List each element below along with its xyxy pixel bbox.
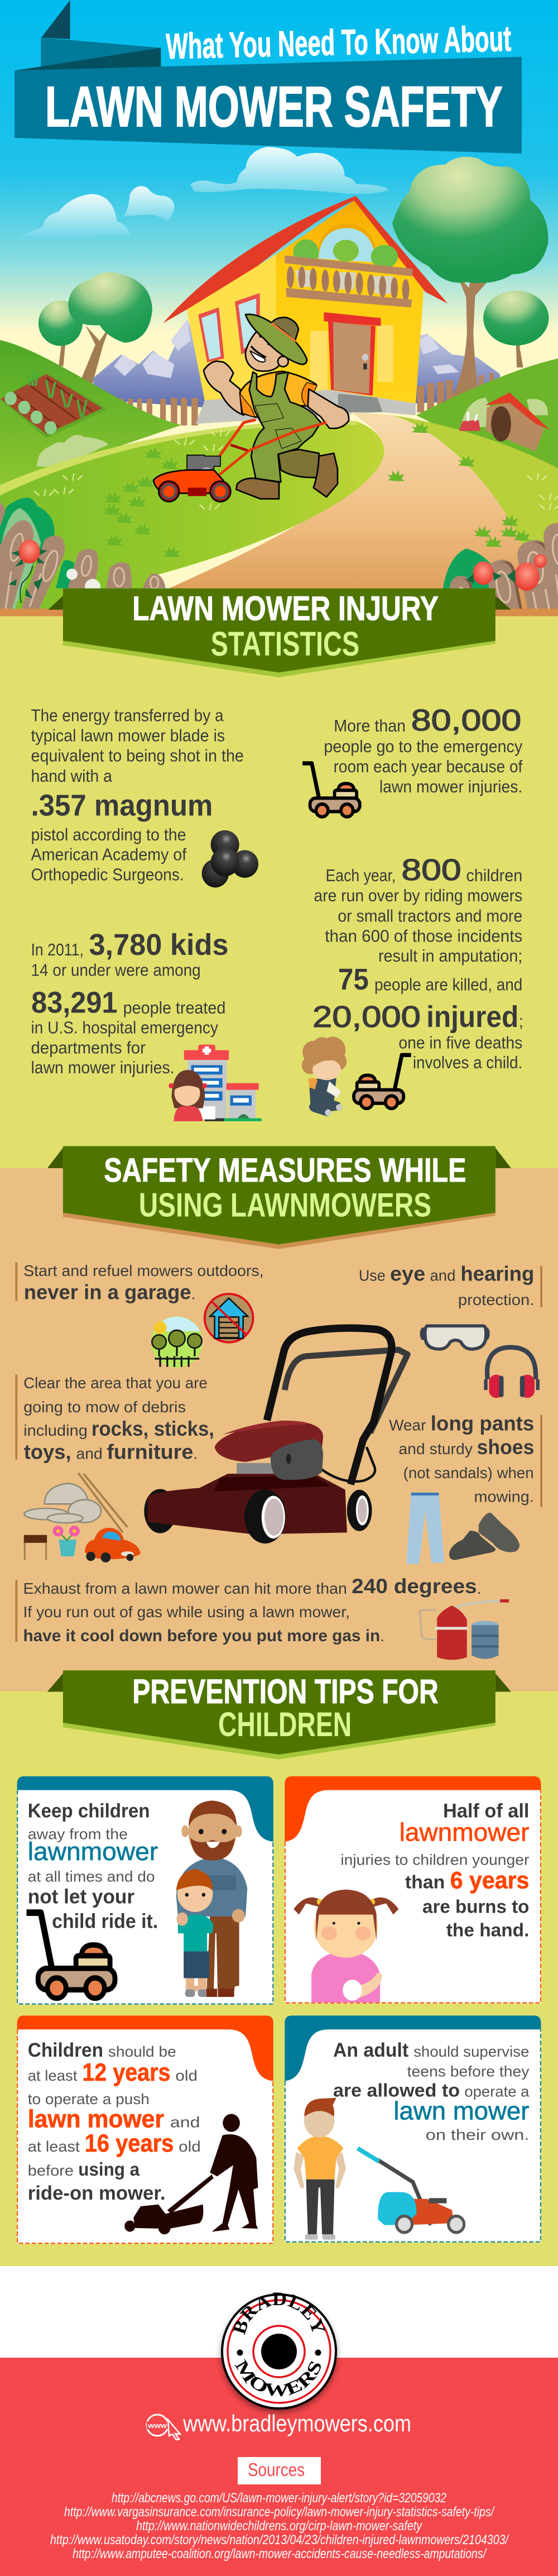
text: clear the area [15,1374,214,1463]
clouds [21,147,388,238]
right lawn [393,415,558,556]
title ribbon [15,0,522,154]
text: magnum energy: American Academy of [31,845,187,864]
text: should be [108,2043,176,2060]
text: 800 children: people are killed, and [374,976,522,995]
text: clear the area: furniture [107,1440,193,1463]
handles [285,1350,407,1433]
illustration: silhouette mowing [124,2114,258,2234]
mountains [93,319,500,408]
icon: injured child [302,1037,347,1116]
engine [237,1463,274,1474]
text: 800 children [312,854,523,1072]
far hill: right [416,359,558,474]
icon: hospital [184,1045,262,1121]
text: on their own. [426,2126,529,2143]
section banner: PREVENTION TIPS FOR [132,1672,439,1711]
text: at least [28,2067,78,2084]
sources list: http://www.nationwidechildrens.org/cirp-lawn-mower-safety [136,2518,423,2534]
icon: jeans [406,1493,444,1564]
fence: back [119,373,494,426]
title [45,18,512,138]
text: 3,780 kids: people treated [123,998,225,1017]
card: half of all [285,1776,541,2003]
text: exhaust [15,1575,481,1645]
text: never in a garage: Start and refuel mowers outdoors, [23,1262,264,1279]
text: long pants and shoes: and sturdy [398,1440,473,1457]
text: 3,780 kids: in U.S. hospital emergency [31,1019,218,1038]
panel: hero scene [0,0,558,664]
icon: mower [27,1913,115,1998]
text: old [179,2138,201,2155]
text: long pants and shoes: mowing. [474,1488,534,1505]
front boot [236,478,279,499]
text: eye and hearing: hearing [460,1262,534,1285]
text: long pants and shoes [389,1412,542,1507]
text: eye and hearing: eye [390,1262,425,1285]
deck [148,1474,347,1535]
raised arm and fist [204,361,244,415]
text: at least [28,2138,80,2155]
text: magnum energy [31,706,244,885]
background: peach safety section [0,1168,558,1692]
panel: prevention tips for children [17,1670,541,2244]
illustration: blue lawn mower [358,2148,465,2234]
section banner: LAWN MOWER INJURY [132,589,439,628]
back leg [278,450,319,477]
grass tufts [34,422,558,557]
vine [20,566,32,603]
icon: mower mirrored [354,1055,411,1108]
icon: oil can and barrel [420,1601,509,1660]
text: 800 children: 20,000 [312,1001,421,1034]
hat [272,317,299,342]
posts [0,503,166,609]
card: children should be [17,2015,273,2244]
icon: toy car [85,1528,141,1562]
text: clear the area: including [23,1422,88,1439]
bush right [461,398,548,427]
mower wheels [158,481,179,501]
text: 80,000: More than [334,716,406,735]
text: 800 children: involves a child. [413,1053,522,1072]
tree: small right [483,291,549,367]
text: 3,780 kids: 3,780 kids [89,929,228,962]
text: long pants and shoes: Wear [389,1416,426,1433]
text: never in a garage [15,1262,264,1304]
text: 6 years [450,1867,529,1894]
text: magnum energy: hand with a [31,767,113,786]
section banner: SAFETY MEASURES WHILE [104,1151,466,1189]
illustration: girl with burned hand [294,1890,398,2003]
text: at all times and do [28,1868,155,1885]
text [28,2039,201,2204]
right arm and hand [308,389,349,428]
text: 80,000: lawn mower injuries. [379,778,522,796]
text: long pants and shoes: (not sandals) when [403,1464,534,1481]
text: never in a garage: . [191,1285,195,1303]
text: lawn mower [393,2097,530,2125]
icon: no garage [205,1294,253,1342]
text: 80,000: 80,000 [411,704,521,737]
ground strip [0,609,558,616]
text: old [175,2067,198,2084]
card: keep children away [17,1776,273,2004]
text: lawn mower [28,2106,164,2133]
icon: web cursor: www [147,2421,167,2430]
text: 800 children: children [466,866,522,885]
text: are burns to [422,1896,529,1917]
gardener and lawn mower [153,314,349,501]
text: 800 children: than 600 of those incidents [325,927,522,946]
mower engine [187,455,220,479]
text: child ride it. [52,1910,158,1933]
text: than [405,1871,445,1892]
icon: rocks and sticks [24,1473,127,1532]
text: Half of all [443,1800,529,1822]
background: red footer [0,2358,558,2576]
text: exhaust: . [477,1580,481,1597]
red rose [19,539,40,563]
door [324,312,381,396]
text: clear the area: . [193,1445,198,1462]
mower deck [153,470,227,493]
vegetable garden [0,370,108,438]
tree: big right [392,157,548,398]
text: injuries to children younger [340,1851,530,1868]
tree: small left [39,300,83,366]
text: clear the area: rocks, sticks, [92,1417,214,1440]
text: clear the area: and [76,1445,103,1462]
balcony [285,240,413,308]
text: lawnmower [400,1819,530,1847]
illustration: father and son [176,1800,247,1997]
steps and base [196,390,416,424]
text: away from the [28,1825,128,1842]
overalls [249,372,321,482]
text: exhaust: . [380,1627,384,1645]
website url: www.bradleymowers.com [182,2410,411,2436]
section banner [47,1670,511,1760]
icon: safety goggles [420,1326,490,1349]
icon: ear muffs [484,1347,540,1398]
text: 800 children: result in amputation; [378,947,522,966]
text: lawnmower [28,1838,158,1866]
text: eye and hearing: and [430,1267,455,1284]
section banner: CHILDREN [218,1705,352,1743]
text: 3,780 kids: lawn mower injuries. [31,1059,175,1077]
text: magnum energy: typical lawn mower blade is [31,727,225,745]
icon: shoes [449,1513,519,1560]
mower handles [219,420,326,475]
text: 3,780 kids [31,929,228,1077]
bush [37,435,109,468]
logo: Bradley Mowers seal [217,2293,341,2417]
text: magnum energy: Orthopedic Surgeons. [31,866,184,885]
logo: Bradley Mowers seal: BRADLEY [233,2293,325,2335]
logo: Bradley Mowers seal: MOWERS [234,2359,321,2397]
text: 12 years [82,2059,171,2086]
sources list [50,2491,509,2561]
panel: lawn mower injury statistics [31,589,523,1121]
text: 3,780 kids: departments for [31,1039,146,1058]
sources heading [238,2457,321,2484]
text: 800 children: are run over by riding mowers [314,886,522,905]
bush [0,498,55,609]
card: an adult should supervise [285,2015,541,2242]
text: operate a [464,2083,530,2100]
text: clear the area: toys, [24,1440,71,1463]
section banner: STATISTICS [211,625,359,663]
text: magnum energy: pistol according to the [31,825,186,844]
icon: bullets [202,830,258,887]
icon: web cursor [147,2415,180,2440]
text: Keep children [28,1800,150,1822]
text: 800 children: ; [519,1012,523,1031]
far hill: left [0,340,181,488]
house [163,196,448,424]
icon: outdoor yard [151,1316,203,1368]
sources list: http://abcnews.go.com/US/lawn-mower-injury-alert/story?id=32059032 [112,2491,446,2506]
text: using a [78,2158,140,2180]
text [28,1800,158,1933]
section banner [48,589,511,677]
main lawn [0,420,384,616]
windows [198,308,224,362]
text: exhaust: 240 degrees [352,1575,477,1598]
text: 80,000: people go to the emergency [324,737,523,756]
background: white logo band [0,2266,558,2358]
text: eye and hearing [359,1262,542,1308]
section banner [47,1146,511,1249]
text: before [28,2162,74,2179]
text: An adult [333,2039,408,2061]
white roses [66,568,78,580]
text: 16 years [85,2130,174,2157]
text: magnum energy: equivalent to being shot in the [31,747,244,766]
text: eye and hearing: Use [359,1267,386,1284]
foreground: right bush, fence and roses [443,523,558,609]
section banner: USING LAWNMOWERS [139,1187,431,1224]
text: 800 children: one in five deaths [398,1034,522,1052]
text: the hand. [446,1919,529,1941]
text: to operate a push [28,2091,150,2107]
illustration: teen boy [294,2098,346,2240]
text: 800 children: 800 [401,854,461,887]
dirt path [107,412,558,616]
icon: mower [302,763,360,817]
icon: girl [169,1070,207,1121]
background: lime prevention section [0,1691,558,2267]
text: 80,000: room each year because of [334,757,523,776]
text: 3,780 kids: In 2011, [31,941,84,959]
tree: big left [68,273,152,386]
text: ride-on mower. [28,2182,166,2204]
text: magnum energy: The energy transferred by a [31,706,224,725]
text [333,2039,530,2143]
text: 3,780 kids: 14 or under were among [31,961,201,980]
text: teens before they [407,2063,530,2080]
text: 3,780 kids: 83,291 [31,987,117,1020]
text: eye and hearing: protection. [458,1291,534,1308]
text: never in a garage: never in a garage [24,1281,191,1304]
back wheels [144,1489,176,1533]
illustration: large lawn mower [144,1328,407,1543]
text: long pants and shoes: shoes [477,1436,534,1459]
text: exhaust: Exhaust from a lawn mower can hit more than [23,1580,347,1597]
text: not let your [28,1886,134,1908]
front wheel [244,1489,286,1543]
text: clear the area: going to mow of debris [23,1398,186,1416]
sleeves [239,393,255,417]
text: exhaust: If you run out of gas while using a lawn mower, [23,1603,350,1621]
background: lime statistics section [0,609,558,1170]
text: 800 children: Each year, [326,866,396,885]
text: and [170,2114,200,2131]
text [340,1800,530,1941]
panel: safety measures [15,1146,542,1660]
foreground: left bush, fence and roses [0,498,166,609]
text: 800 children: 75 [338,963,369,996]
icon: flower vase [52,1526,80,1556]
text: Children [28,2039,103,2061]
text: exhaust: have it cool down before you put more gas in [23,1627,380,1645]
text: long pants and shoes: long pants [431,1412,534,1435]
text: 800 children: or small tractors and more [338,907,522,925]
text: are allowed to [333,2080,460,2101]
back boot [314,453,338,497]
text: should supervise [413,2043,529,2060]
shirt [240,371,316,417]
sources heading: Sources [248,2459,305,2480]
head [246,329,284,371]
text: clear the area: Clear the area that you are [23,1374,208,1392]
icon: table [24,1535,47,1560]
text: 80,000 [324,704,523,796]
sky [0,0,558,616]
text: magnum energy: .357 magnum [31,790,213,823]
dog house [459,393,550,451]
text: 800 children: injured [426,1001,518,1034]
